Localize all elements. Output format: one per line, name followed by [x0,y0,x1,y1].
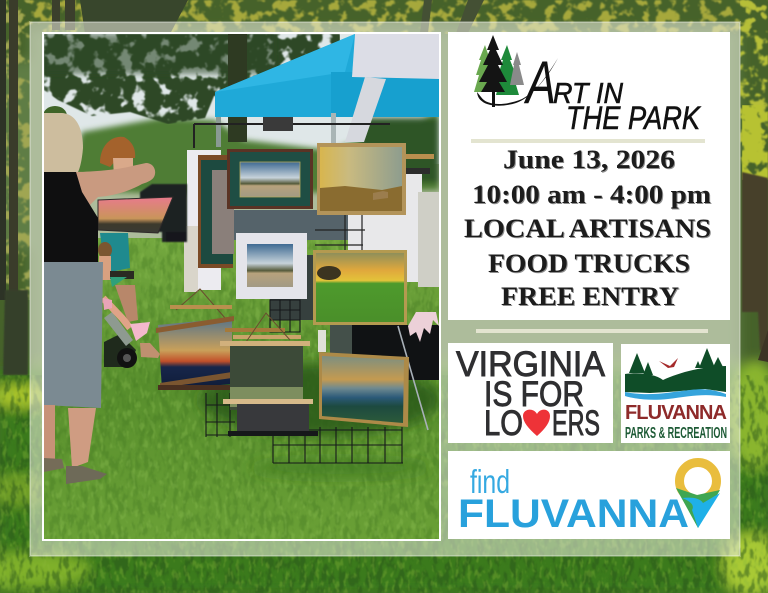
painting: green field [313,250,407,325]
black table and tassels [318,312,439,430]
white canopy [345,34,439,142]
booth panels [184,117,439,320]
woman in black top [44,113,155,484]
blue tent [215,34,439,147]
divider [476,329,708,333]
logo text: VIRGINIA [456,345,606,384]
grass shadow [200,364,440,478]
event photo [43,34,440,540]
feature: local artisans: LOCAL ARTISANS [464,214,711,243]
panel: Find Fluvanna [448,451,730,539]
distant trees [44,112,439,195]
icon: hills, trees and river [625,348,726,400]
panel: Virginia is for Lovers [448,343,613,443]
feature: food trucks: FOOD TRUCKS [488,249,690,278]
painting: white mat lake [236,233,307,299]
black truck [140,184,187,242]
grid racks [206,300,403,463]
logo: Art in the Park: RT IN [553,78,623,110]
grass texture [44,238,439,540]
tree trunk [228,34,247,142]
feature: free entry: FREE ENTRY [501,282,679,311]
ground texture [0,375,768,593]
logo text: Fluvanna: FLUVANNA [458,492,689,536]
logo text: art in: A [524,49,556,116]
divider [471,139,705,143]
logo text: ERS [552,404,600,443]
held painting [98,197,173,233]
sky [44,34,439,164]
panel: event details [448,32,730,320]
woman with ponytail [100,137,160,358]
tree trunks [80,0,188,34]
waterfall painting [198,155,234,268]
painting: hanging oak tree alley [220,313,318,436]
painting: deer and rainbow [317,143,406,215]
panel: Fluvanna Parks and Recreation [621,344,730,443]
date: June 13, 2026 [503,145,675,174]
logo text: LO [484,404,523,443]
grass lawn [44,238,439,540]
sunlit leaves in canopy [0,0,768,34]
time: 10:00 am - 4:00 pm [472,180,711,209]
logo text: the park: THE PARK [566,100,701,136]
painting: hanging sunset [156,289,234,390]
logo text: Fluvanna: FLUVANNA [625,402,727,424]
stroller and child [98,242,150,368]
logo text [456,345,606,443]
icon: heart [523,410,550,436]
logo text: find: find [470,463,510,500]
tree foliage [43,34,340,126]
icon: map pin [676,462,720,528]
icon: pine trees [474,35,558,107]
logo text: IS FOR [484,375,584,414]
painting: sunset over hills [319,352,409,427]
painting: lake with green mat [227,149,313,209]
photo white border [43,33,440,540]
logo: Art in the Park [474,35,701,136]
